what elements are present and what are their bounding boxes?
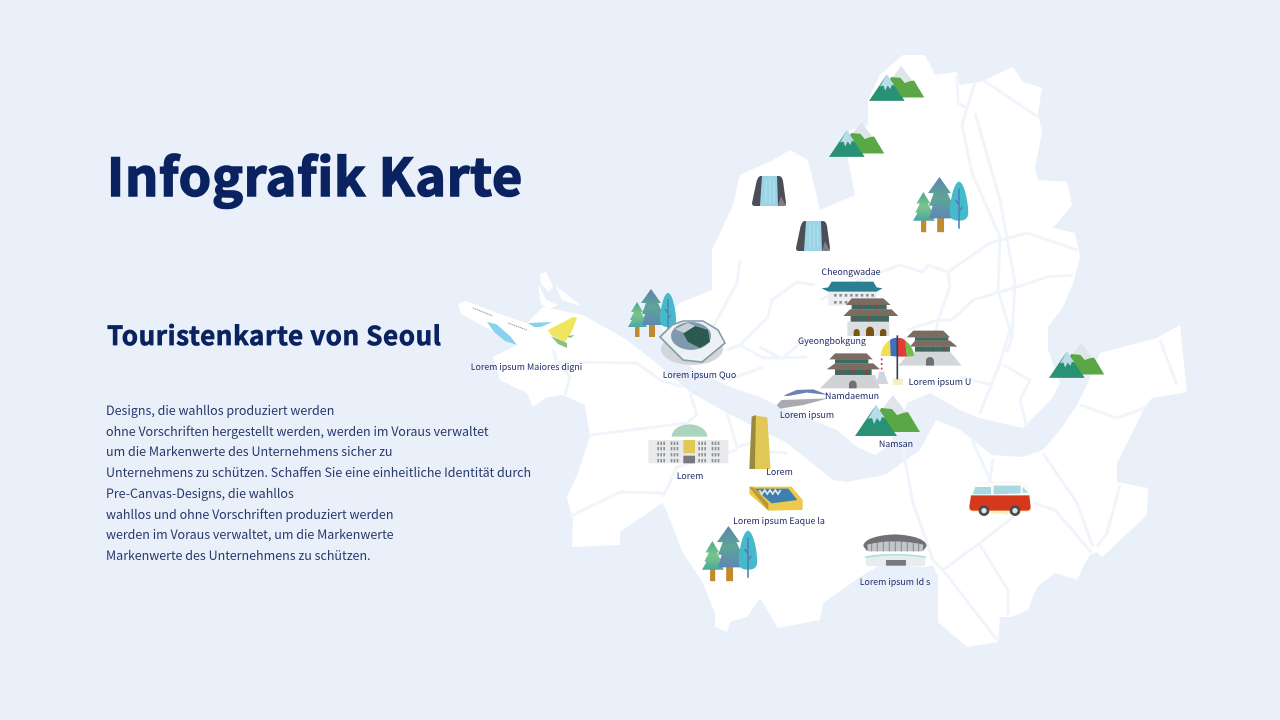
- icon: airplane: [458, 301, 577, 348]
- subtitle: Touristenkarte von Seoul: [107, 316, 442, 353]
- label: stadium: Lorem ipsum Quo: [663, 368, 736, 381]
- icon: waterfall 1: [752, 176, 786, 206]
- label: arena: Lorem ipsum Id s: [860, 575, 930, 588]
- road network: [553, 75, 1177, 640]
- title: Infografik Karte: [107, 136, 523, 211]
- icon: waterfall 2: [796, 221, 830, 251]
- label: Namdaemun: Namdaemun: [825, 389, 879, 402]
- body text: Designs, die wahllos produziert werden: [106, 400, 334, 419]
- icon: mountain Namsan: [855, 395, 920, 436]
- icon: bridge: [777, 389, 828, 409]
- label: Gyeongbokgung: Gyeongbokgung: [798, 334, 866, 347]
- icon: mountain east: [1049, 343, 1104, 378]
- body text: werden im Voraus verwaltet, um die Markenwerte: [106, 524, 394, 543]
- body text: Unternehmens zu schützen. Schaffen Sie eine einheitliche Identität durch: [106, 462, 531, 481]
- icon: Namdaemun: [820, 353, 880, 388]
- label: Cheongwadae: Cheongwadae: [821, 265, 881, 278]
- label: aquarium: Lorem ipsum Eaque la: [733, 514, 825, 527]
- Han river: [627, 323, 1100, 482]
- icon: National Assembly: [648, 424, 728, 463]
- label: assembly: Lorem: [677, 469, 703, 482]
- icon: domed arena: [863, 534, 927, 566]
- body text: Markenwerte des Unternehmens zu schützen.: [106, 545, 371, 564]
- icon: trees west: [628, 289, 676, 337]
- body text: wahllos und ohne Vorschriften produziert werden: [106, 504, 393, 523]
- label: tower: Lorem: [766, 465, 793, 478]
- label: Namsan: Namsan: [879, 437, 913, 450]
- body text: ohne Vorschriften hergestellt werden, werden im Voraus verwaltet: [106, 421, 489, 440]
- body text: [106, 400, 531, 564]
- icon: red van: [968, 483, 1032, 516]
- body text: um die Markenwerte des Unternehmens sicher zu: [106, 441, 393, 460]
- label: east gate: Lorem ipsum U: [909, 375, 971, 388]
- icon: mountain north 1: [869, 66, 924, 101]
- icon: stadium: [660, 321, 725, 365]
- icon: umbrella with pagoda: [876, 335, 914, 385]
- icon: Gyeongbokgung: [843, 298, 898, 336]
- icon: Cheongwadae: [822, 282, 883, 306]
- icon: gate east: [898, 331, 962, 366]
- icon: mountain north 2: [829, 122, 884, 157]
- icon: 63 tower: [749, 415, 771, 469]
- icon: trees northeast: [913, 177, 968, 232]
- map of Seoul: land silhouette: [493, 55, 1187, 647]
- icon: trees south: [702, 526, 757, 581]
- body text: Pre-Canvas-Designs, die wahllos: [106, 483, 294, 502]
- label: bridge: Lorem ipsum: [780, 408, 834, 421]
- label: airplane: Lorem ipsum Maiores digni: [471, 360, 582, 373]
- icon: aquarium box: [749, 487, 803, 511]
